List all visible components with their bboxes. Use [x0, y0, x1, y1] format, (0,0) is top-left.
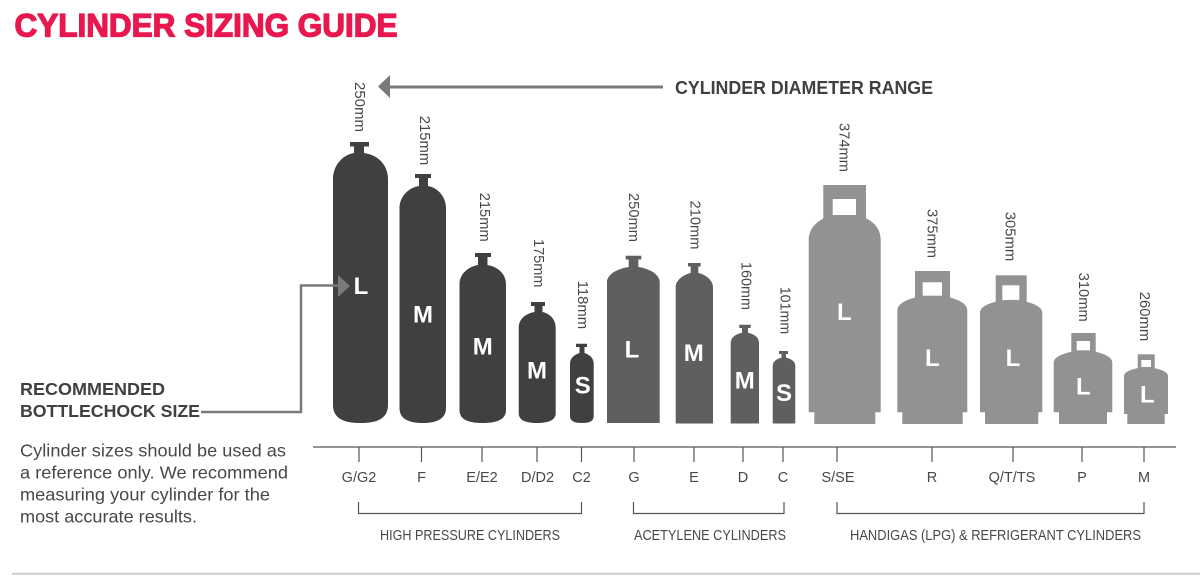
- diameter labels: 175mm: [530, 239, 546, 287]
- cylinder: P: L: [1076, 373, 1091, 400]
- text block: reference note: most accurate results.: [20, 507, 197, 527]
- cylinder code labels: Q/T/TS: [989, 470, 1035, 486]
- cylinder: D/D2: [519, 302, 556, 423]
- cylinder: G: L: [625, 336, 639, 363]
- diameter labels: 215mm: [416, 116, 432, 165]
- diameter labels: 118mm: [574, 281, 590, 329]
- arrow: recommended bottlechock size: [201, 275, 350, 412]
- panel: handigas and refrigerant cylinders: [809, 185, 1168, 424]
- cylinder: M: [1124, 354, 1168, 424]
- diameter labels: 210mm: [686, 200, 702, 249]
- text block: reference note: Cylinder sizes should be used as: [20, 440, 286, 460]
- text block: reference note: a reference only. We recommend: [20, 462, 288, 482]
- cylinder code labels: C: [778, 470, 788, 486]
- diameter labels: 375mm: [924, 209, 940, 258]
- cylinder code labels: E/E2: [466, 470, 498, 486]
- panel: high pressure cylinders: [333, 142, 594, 423]
- callout: recommended bottlechock size: RECOMMENDED: [20, 379, 165, 399]
- title: CYLINDER SIZING GUIDE: [14, 8, 398, 44]
- cylinder: E/E2: [460, 253, 506, 423]
- bracket: acetylene: [634, 502, 784, 514]
- arrow: cylinder diameter range: [378, 75, 663, 98]
- cylinder: F: M: [413, 302, 433, 329]
- cylinder: M: L: [1140, 381, 1155, 408]
- diameter labels: 250mm: [351, 82, 367, 132]
- cylinder: E: [676, 263, 713, 424]
- cylinder code labels: D/D2: [521, 470, 554, 486]
- cylinder: G/G2: [333, 142, 388, 423]
- cylinder: C2: S: [575, 372, 591, 399]
- diameter labels: 305mm: [1002, 212, 1018, 261]
- cylinder code labels: S/SE: [821, 470, 855, 486]
- cylinder: C: S: [776, 380, 792, 407]
- cylinder: D: M: [735, 368, 755, 395]
- group label: handigas: HANDIGAS (LPG) & REFRIGERANT CYLINDERS: [850, 528, 1141, 544]
- cylinder code labels: G/G2: [342, 470, 376, 486]
- cylinder: R: [897, 271, 967, 424]
- cylinder: S/SE: L: [837, 299, 852, 326]
- diameter labels: 250mm: [625, 193, 641, 242]
- cylinder code labels: C2: [572, 470, 591, 486]
- diameter labels: 101mm: [776, 287, 792, 334]
- diameter labels: 374mm: [836, 123, 852, 172]
- diameter labels: 160mm: [738, 262, 754, 310]
- diameter labels: 260mm: [1136, 292, 1152, 341]
- cylinder: S/SE: [809, 185, 881, 424]
- cylinder code labels: F: [417, 470, 426, 486]
- cylinder: C: [773, 351, 795, 424]
- group label: high pressure: HIGH PRESSURE CYLINDERS: [380, 528, 560, 544]
- cylinder: P: [1054, 333, 1112, 424]
- cylinder: D: [731, 325, 759, 424]
- cylinder: R: L: [925, 345, 940, 372]
- bracket: handigas: [837, 502, 1144, 514]
- cylinder code labels: [342, 470, 1150, 486]
- bracket: high pressure: [358, 502, 582, 514]
- cylinder: E: M: [684, 340, 704, 367]
- cylinder: D/D2: M: [527, 357, 547, 384]
- axis with ticks: [313, 447, 1176, 462]
- cylinder: G/G2: L: [354, 273, 368, 300]
- callout: recommended bottlechock size: BOTTLECHOCK SIZE: [20, 401, 200, 421]
- cylinder: F: [400, 174, 446, 423]
- cylinder code labels: P: [1077, 470, 1087, 486]
- diameter labels: [351, 82, 1152, 341]
- cylinder code labels: G: [628, 470, 640, 486]
- panel: acetylene cylinders: [607, 256, 795, 424]
- diameter labels: 310mm: [1075, 273, 1091, 322]
- cylinder: C2: [570, 344, 594, 423]
- heading: cylinder diameter range: CYLINDER DIAMETER RANGE: [675, 78, 933, 98]
- cylinder code labels: M: [1138, 470, 1150, 486]
- cylinder code labels: D: [738, 470, 748, 486]
- cylinder: Q/T/TS: [980, 275, 1042, 424]
- cylinder code labels: R: [927, 470, 937, 486]
- cylinder: G: [607, 256, 660, 423]
- group label: acetylene: ACETYLENE CYLINDERS: [634, 528, 786, 544]
- cylinder: Q/T/TS: L: [1006, 345, 1020, 372]
- text block: reference note: measuring your cylinder for the: [20, 485, 270, 505]
- cylinder: E/E2: M: [473, 333, 493, 360]
- diameter labels: 215mm: [476, 193, 492, 242]
- cylinder code labels: E: [689, 470, 699, 486]
